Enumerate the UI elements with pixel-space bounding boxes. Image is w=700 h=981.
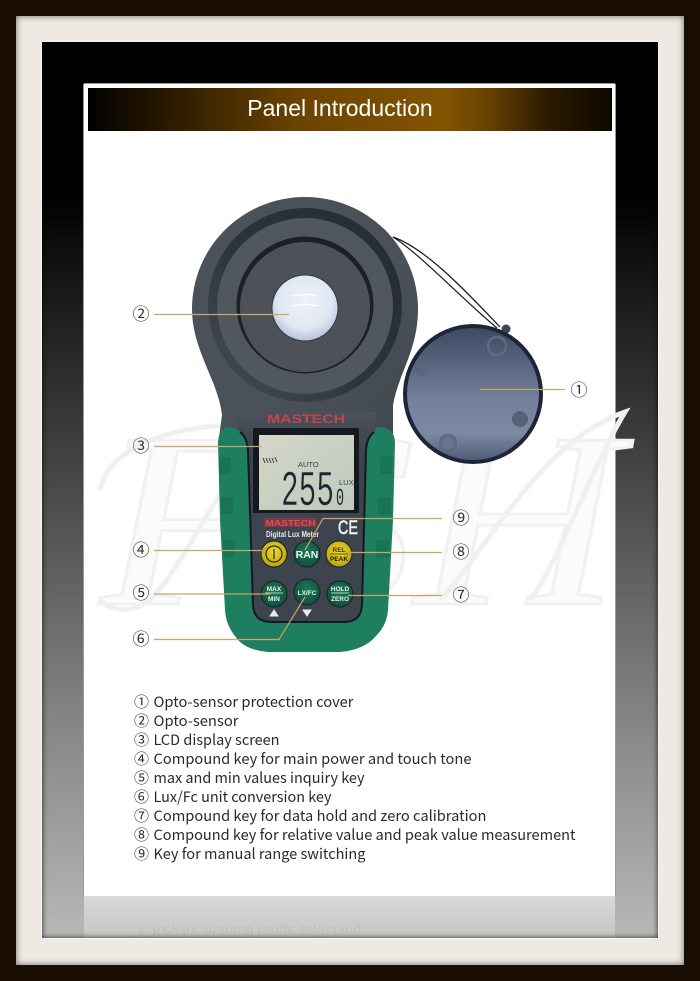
HOLD ZERO button: HOLD (331, 586, 350, 593)
legend list: ⑨ (134, 843, 149, 864)
legend list: Key for manual range switching (154, 843, 366, 864)
sensor dome (272, 276, 338, 340)
legend list (134, 691, 576, 864)
callout numbers: ⑥ (132, 630, 150, 649)
callout numbers: ③ (132, 437, 150, 456)
legend list: Compound key for data hold and zero calibration (154, 805, 486, 826)
legend list: ⑧ (134, 824, 149, 845)
MAX MIN button: MAX (267, 586, 282, 593)
REL PEAK button: REL (332, 547, 346, 554)
RAN button: RAN (296, 549, 318, 561)
callout numbers (132, 305, 588, 649)
legend list: Compound key for relative value and peak value measurement (154, 824, 576, 845)
meter head and body (192, 197, 418, 445)
REL PEAK button (326, 541, 352, 567)
legend list: ⑥ (134, 786, 149, 807)
legend list: Opto-sensor (154, 710, 239, 731)
legend list: Opto-sensor protection cover (154, 691, 354, 712)
callout numbers: ⑨ (452, 509, 470, 528)
buttons (261, 541, 353, 616)
HOLD ZERO button (327, 581, 353, 607)
cover strap (393, 237, 500, 328)
MAX MIN button (261, 581, 287, 607)
LCD screen: 255 (281, 464, 334, 521)
LCD screen (253, 428, 359, 521)
HOLD ZERO button: ZERO (331, 596, 349, 603)
REL PEAK button: PEAK (330, 556, 348, 563)
LCD screen: AUTO (298, 460, 319, 469)
legend list: ② (134, 710, 149, 731)
callout numbers: ① (570, 381, 588, 400)
leader lines (154, 314, 565, 640)
legend list: ① (134, 691, 149, 712)
model badges: MASTECH (266, 518, 316, 528)
legend list: Compound key for main power and touch tone (154, 748, 472, 769)
brand name: MASTECH (267, 412, 345, 426)
reflection strip (84, 896, 615, 938)
LX FC button: LX/FC (298, 590, 317, 597)
callout numbers: ④ (132, 541, 150, 560)
title bar (88, 88, 612, 131)
callout numbers: ⑧ (452, 543, 470, 562)
control panel (238, 412, 376, 622)
title bar: Panel Introduction (247, 95, 433, 121)
LCD screen: 0 (336, 486, 344, 513)
legend list: ③ (134, 729, 149, 750)
arrow up and down (270, 610, 311, 616)
legend list: ⑤ (134, 767, 149, 788)
power button (261, 541, 287, 567)
legend list: ⑦ (134, 805, 149, 826)
watermark: FSH (98, 382, 633, 659)
LCD screen: LUX (339, 478, 354, 487)
white content panel (84, 84, 615, 896)
callout numbers: ⑤ (132, 584, 150, 603)
MAX MIN button: MIN (268, 596, 280, 603)
legend list: Lux/Fc unit conversion key (154, 786, 332, 807)
callout numbers: ② (132, 305, 150, 324)
protection cover (403, 324, 543, 464)
legend list: ④ (134, 748, 149, 769)
legend list: max and min values inquiry key (154, 767, 365, 788)
green rubber bumper (218, 427, 395, 652)
model badges: CE (338, 518, 358, 539)
model badges: Digital Lux Meter (266, 529, 320, 539)
legend list: LCD display screen (154, 729, 280, 750)
callout numbers: ⑦ (452, 586, 470, 605)
model badges (264, 518, 358, 539)
